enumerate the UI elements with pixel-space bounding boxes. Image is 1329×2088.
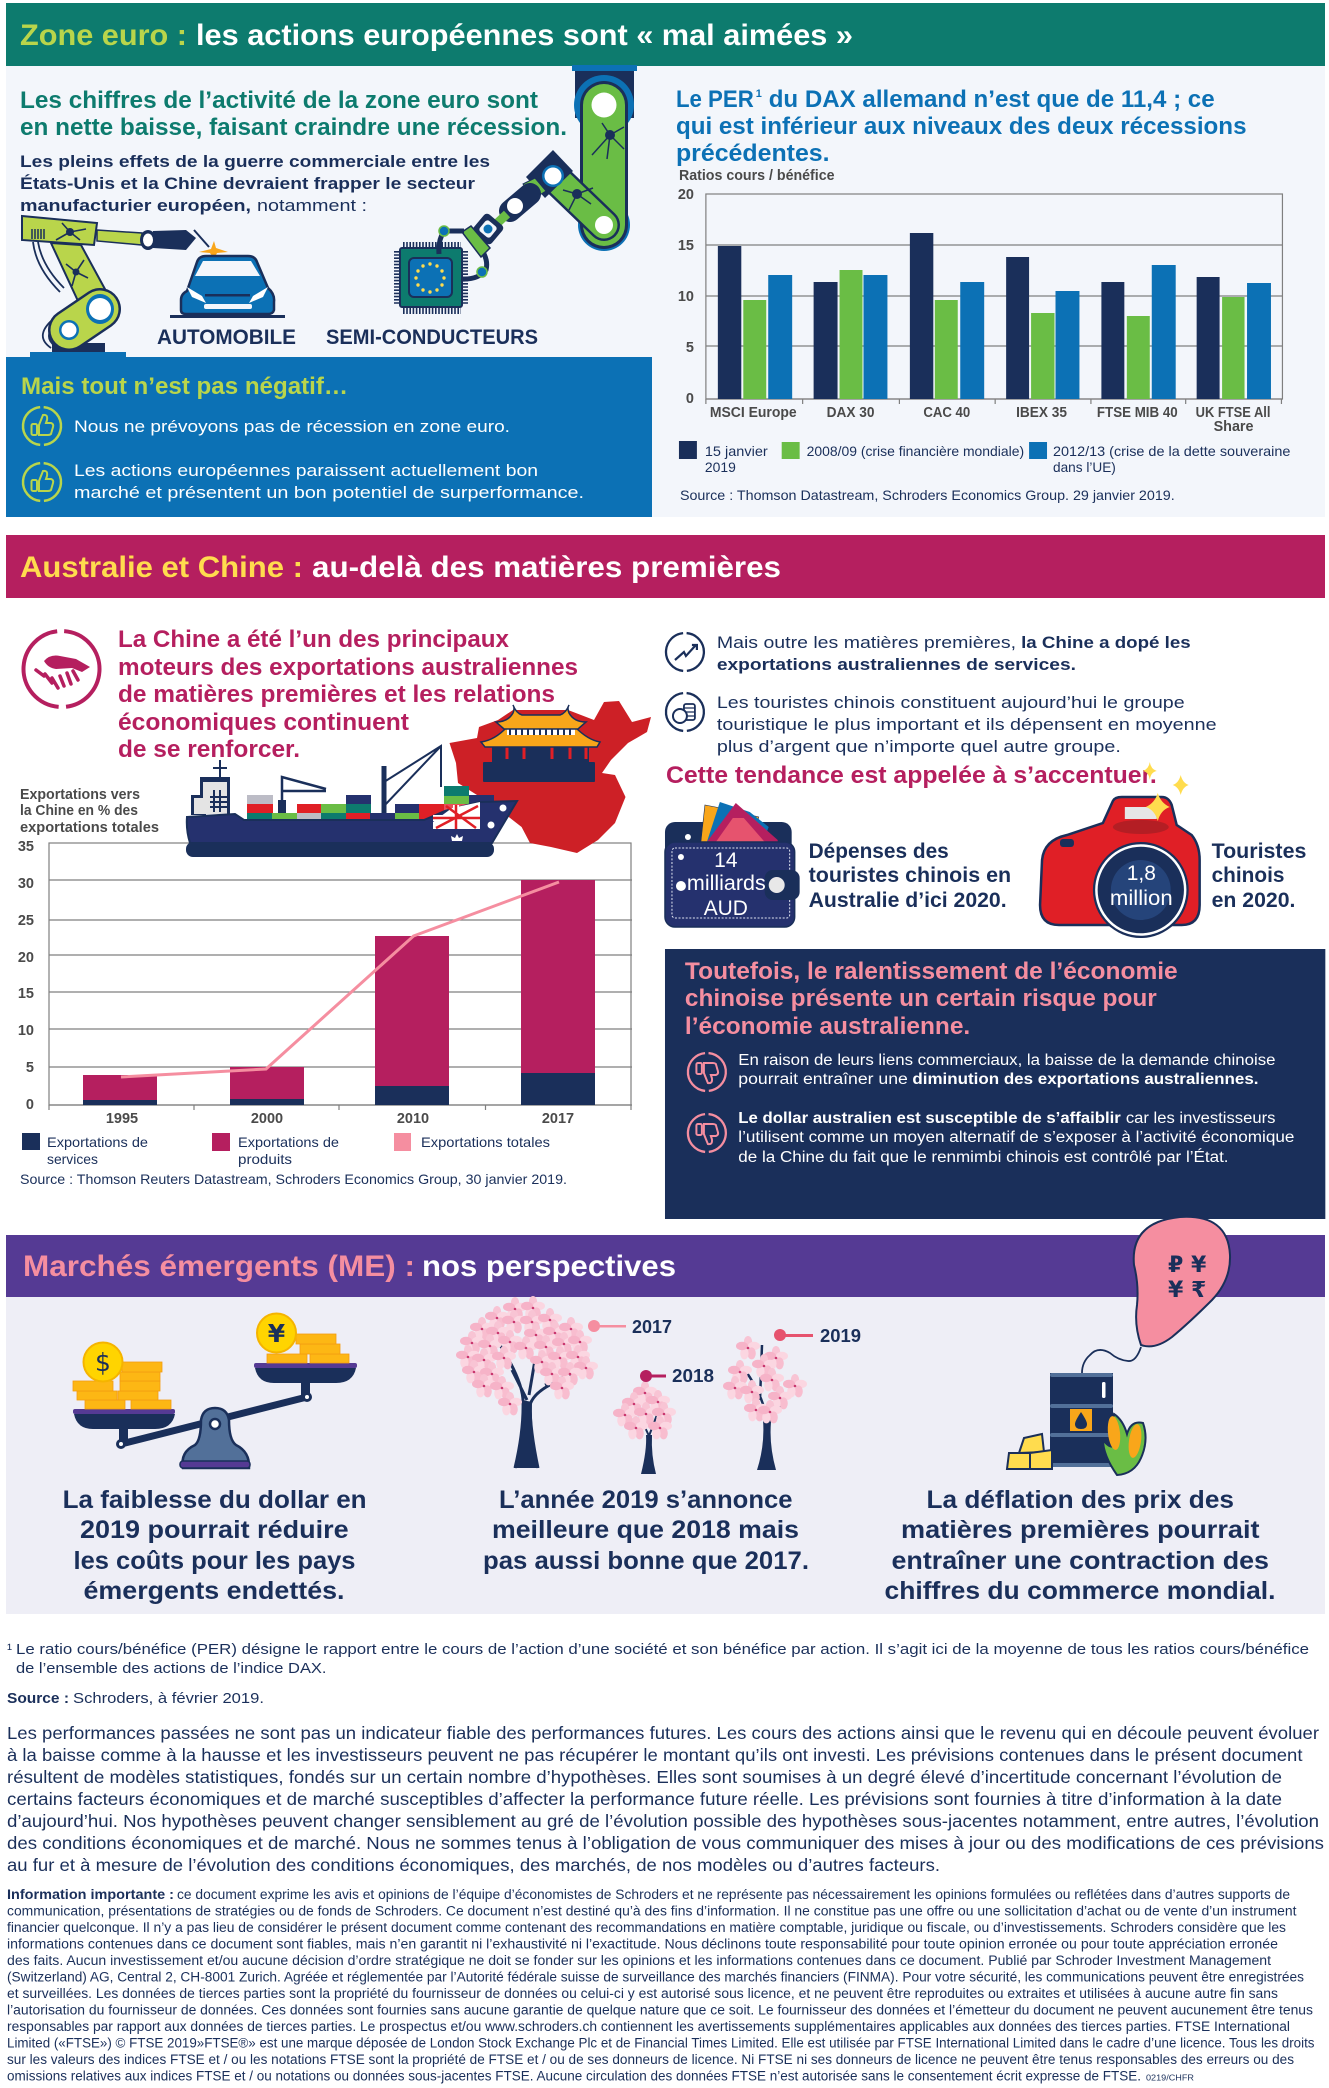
heading: China driver of Australian exports: moteurs des exportations australiennes [118, 654, 578, 681]
chart legend: 2019 [705, 459, 736, 475]
heading: not all negative: Mais tout n’est pas négatif… [21, 373, 348, 400]
heading: China driver of Australian exports: La Chine a été l’un des principaux [118, 626, 510, 653]
legal notice: des faits. Aucun investissement et/ou aucune décision d’ordre stratégique ne doit se fonder sur les opinions et les informations contenues dans ce document. Publié par Schroder Investment Management [7, 1953, 1271, 1968]
legal notice: (Switzerland) AG, Central 2, CH-8001 Zurich. Agréée et réglementée par l’Autorité fédérale suisse de surveillance des marchés financiers (FINMA). Pour votre sécurité, les communications peuvent être enregistrées [7, 1970, 1304, 1984]
label: 2017 [588, 1317, 672, 1337]
illustration: container ship with Australian flag [186, 746, 517, 857]
icon: cherry tree 2018 [613, 1381, 676, 1474]
caption: commodity deflation [884, 1486, 1276, 1605]
icon: growth chart [664, 631, 705, 673]
icon: wallet with banknotes: milliards [687, 872, 766, 895]
icon: coins [664, 691, 705, 733]
footnote [7, 1641, 1309, 1677]
legal notice [7, 1887, 1315, 2084]
heading: activity falling: en nette baisse, faisant craindre une récession. [20, 114, 567, 141]
legal notice: financier quelconque. Il n’y a pas lieu de considérer le présent document comme contenant des recommandations en matière comptable, juridique ou fiscale, ou d’investissements. Schroders considère que les [7, 1920, 1286, 1935]
disclaimer paragraph: past performance: à la baisse comme à la hausse et les investisseurs peuvent ne pas récupérer le montant qu’ils ont investi. Les prévisions contenues dans le présent document [7, 1745, 1303, 1765]
text: Chinese tourists: plus d’argent que n’importe quel autre groupe. [717, 737, 1121, 756]
heading: DAX PER [676, 86, 1247, 167]
icon: cherry tree 2017 [456, 1296, 598, 1468]
heading: risk [685, 958, 1178, 1040]
text: spending: Australie d’ici 2020. [809, 889, 1007, 912]
disclaimer paragraph: past performance: résultent de modèles statistiques, fondés sur un certain nombre d’hypothèses. Elles sont soumises à un degré élevé d’incertitude concernant l’évolution de [7, 1767, 1282, 1787]
source line [7, 1690, 264, 1707]
legal notice: 0219/CHFR [1146, 2072, 1194, 2082]
caption: weak dollar [63, 1486, 367, 1605]
chart axis title: Exportations vers [20, 787, 140, 803]
section header: Zone euro: Zone euro : [20, 19, 187, 52]
section header: Australie et Chine [6, 535, 1325, 598]
heading: DAX PER: Le PER [676, 86, 754, 113]
footnote: Le ratio cours/bénéfice (PER) désigne le rapport entre le cours de l’action d’une société et son bénéfice par action. Il s’agit ici de la moyenne de tous les ratios cours/bénéfice [16, 1641, 1309, 1658]
text: tourists [1212, 840, 1306, 912]
heading: DAX PER: 1 [756, 88, 762, 100]
heading: DAX PER: qui est inférieur aux niveaux des deux récessions [676, 113, 1247, 140]
section header: Marchés émergents: nos perspectives [422, 1250, 676, 1283]
bar chart: price earnings ratios: FTSE MIB 40 [1097, 405, 1178, 421]
heading: China driver of Australian exports: de se renforcer. [118, 736, 300, 763]
text: services exports: Mais outre les matières premières, [717, 633, 1016, 652]
icon: thumbs up [21, 405, 63, 447]
bar and line chart: exports to China: 2000 [251, 1111, 283, 1127]
footnote: ¹ [7, 1641, 12, 1658]
icon: camera: 1,8 [1127, 862, 1156, 885]
disclaimer paragraph: past performance: au fur et à mesure de l’évolution des conditions économiques, des marchés, de nos modèles ou d’autres facteurs. [7, 1855, 940, 1875]
text: lower demand: diminution des exportations australiennes. [912, 1071, 1259, 1088]
bar and line chart: exports to China: 0 [26, 1097, 34, 1113]
label: 2018 [640, 1366, 714, 1386]
panel: risk to Australian economy [665, 949, 1325, 1219]
disclaimer paragraph: past performance [7, 1723, 1324, 1875]
bar chart: price earnings ratios: UK FTSE All [1196, 405, 1270, 421]
bar chart: price earnings ratios: Share [1214, 419, 1254, 435]
heading: activity falling [20, 87, 567, 141]
text block: trade war effects: manufacturier européen, [20, 196, 251, 215]
text: lower demand: En raison de leurs liens commerciaux, la baisse de la demande chinoise [738, 1052, 1275, 1069]
chart legend: dans l’UE) [1053, 459, 1116, 475]
heading: risk: chinoise présente un certain risque pour [685, 985, 1157, 1012]
footnote: de l’ensemble des actions de l’indice DAX. [16, 1660, 326, 1677]
icon: balance with coins: $ [95, 1348, 111, 1377]
text: weaker dollar: Le dollar australien est susceptible de s’affaiblir [738, 1110, 1121, 1127]
caption: 2019 outlook: meilleure que 2018 mais [492, 1516, 799, 1544]
chart legend: 2008/09 (crise financière mondiale) [807, 443, 1024, 459]
caption: commodity deflation: entraîner une contraction des [892, 1547, 1269, 1575]
bar chart: price earnings ratios: CAC 40 [923, 405, 970, 421]
heading: China driver of Australian exports: de matières premières et les relations [118, 681, 555, 708]
caption: weak dollar: émergents endettés. [84, 1577, 344, 1605]
text: services exports [717, 633, 1191, 674]
section header: Marchés émergents: Marchés émergents (ME) : [23, 1250, 415, 1283]
bar and line chart: exports to China: 20 [18, 950, 34, 966]
section header: Marchés émergents [6, 1235, 1325, 1297]
caption: 2019 outlook [483, 1486, 809, 1575]
text block: trade war effects: Les pleins effets de la guerre commerciale entre les [20, 152, 490, 171]
Australian flag [433, 802, 480, 829]
legal notice: Limited («FTSE») © FTSE 2019»FTSE®» est une marque déposée de London Stock Exchange Plc et de Financial Times Limited. Elle est utilisée par FTSE International Limited dans le cadre d’une licence. Tous les droits [7, 2036, 1315, 2050]
chart legend: 15 janvier [705, 443, 768, 459]
chart legend [679, 441, 1291, 475]
bar chart: price earnings ratios: 5 [686, 340, 694, 356]
source line: Source : [7, 1690, 69, 1707]
bar chart: price earnings ratios: 0 [686, 391, 694, 407]
chart axis title: exportations totales [20, 820, 159, 836]
chart axis title: Ratios cours / bénéfice [679, 168, 835, 184]
text: no recession: Nous ne prévoyons pas de récession en zone euro. [74, 417, 510, 436]
heading: activity falling: Les chiffres de l’activité de la zone euro sont [20, 87, 538, 114]
icon: wallet with banknotes [665, 802, 800, 927]
legal notice: ce document exprime les avis et opinions de l’équipe d’économistes de Schroders et ne représente pas nécessairement les opinions formulées ou reflétées dans d’autres supports de [177, 1887, 1290, 1902]
label: 2017: 2017 [632, 1317, 672, 1337]
panel: DAX PER chart [676, 86, 1291, 503]
bar and line chart: exports to China: 25 [18, 913, 34, 929]
caption: commodity deflation: matières premières pourrait [901, 1516, 1260, 1544]
text: European shares cheap: marché et présentent un bon potentiel de surperformance. [74, 483, 584, 502]
panel: not all negative [6, 357, 652, 517]
chart axis title [20, 787, 159, 836]
icon: balance with coins [73, 1314, 357, 1468]
bar and line chart: exports to China: 2010 [397, 1111, 429, 1127]
icon: car [170, 256, 285, 318]
chart legend: services [47, 1151, 98, 1167]
bar chart: price earnings ratios: 10 [678, 289, 694, 305]
text: lower demand: pourrait entraîner une [738, 1071, 908, 1088]
text: European shares cheap [74, 461, 584, 502]
text: weaker dollar: de la Chine du fait que le renmimbi chinois est contrôlé par l’État. [738, 1149, 1229, 1166]
legal notice: Information importante : [7, 1887, 174, 1902]
bar and line chart: exports to China: 10 [18, 1023, 34, 1039]
chart legend: produits [238, 1151, 292, 1167]
bar and line chart: exports to China: 5 [26, 1060, 34, 1076]
bar and line chart: exports to China: 2017 [542, 1111, 574, 1127]
icon: camera [1040, 793, 1200, 938]
bar chart: price earnings ratios [678, 187, 1282, 435]
caption: weak dollar: les coûts pour les pays [74, 1547, 356, 1575]
icon: thumbs down [686, 1112, 727, 1154]
caption: weak dollar: La faiblesse du dollar en [63, 1486, 367, 1514]
chart legend: Exportations de [47, 1134, 148, 1150]
caption: 2019 outlook: L’année 2019 s’annonce [499, 1486, 793, 1514]
illustration: map of China with palace [450, 701, 651, 853]
icon: handshake [21, 628, 102, 710]
icon: sparkles [1143, 762, 1189, 795]
text: Chinese tourists: touristique le plus important et ils dépensent en moyenne [717, 715, 1217, 734]
disclaimer paragraph: past performance: des conditions économiques et de marché. Nous ne sommes tenus à l’obligation de vous communiquer des mises à jour ou des modifications de ces prévisions [7, 1833, 1324, 1853]
icon: robot arm gripping chip [439, 65, 637, 279]
right column: tourism and services [664, 631, 1306, 938]
source note: Source : Thomson Reuters Datastream, Schroders Economics Group, 30 janvier 2019. [20, 1171, 567, 1187]
caption: commodity deflation: La déflation des prix des [926, 1486, 1234, 1514]
panel: emerging markets [6, 1217, 1325, 1614]
text block: trade war effects: États-Unis et la Chine devraient frapper le secteur [20, 174, 475, 193]
text: lower demand [738, 1052, 1275, 1088]
chart legend: Exportations totales [421, 1134, 550, 1150]
text: weaker dollar [738, 1110, 1294, 1166]
icon: deflating balloon with oil barrel, gold and corn [1007, 1217, 1230, 1475]
text: spending: Dépenses des [809, 840, 949, 863]
text: spending [809, 840, 1011, 912]
bar and line chart: exports to China: 30 [18, 876, 34, 892]
section header: Australie et Chine: Australie et Chine : [20, 551, 303, 584]
bar and line chart: exports to China: 15 [18, 986, 34, 1002]
heading: trend: Cette tendance est appelée à s’accentuer. [666, 762, 1157, 789]
icon: cherry tree 2019 [723, 1336, 807, 1470]
icon: camera: million [1110, 887, 1173, 910]
caption: weak dollar: 2019 pourrait réduire [80, 1516, 349, 1544]
text: weaker dollar: l’utilisent comme un moyen alternatif de s’exposer à l’activité économique [738, 1129, 1294, 1146]
bar chart: price earnings ratios: 20 [678, 187, 694, 203]
icon: wallet with banknotes: AUD [704, 897, 748, 920]
text: European shares cheap: Les actions européennes paraissent actuellement bon [74, 461, 538, 480]
text: spending: touristes chinois en [809, 864, 1011, 887]
chart legend: Exportations de [238, 1134, 339, 1150]
icon: deflating balloon with oil barrel, gold and corn: ¥ ₹ [1168, 1278, 1206, 1303]
text: services exports: la Chine a dopé les [1021, 633, 1191, 652]
icon: balance with coins: ¥ [268, 1319, 286, 1348]
panel: euro zone activity [6, 65, 1325, 517]
section header: Australie et Chine: au-delà des matières premières [312, 551, 781, 584]
text: tourists: Touristes [1212, 840, 1306, 863]
legal notice: l’autorisation du fournisseur de données. Ces données sont fournies sans aucune garantie de quelque nature que ce soit. Le fournisseur des données et l’émetteur du document ne peuvent aucunement être tenus [7, 2002, 1313, 2018]
text block: trade war effects [20, 152, 490, 215]
legal notice: sur les valeurs des indices FTSE et / ou les notations FTSE sont la propriété de FTSE et / ou de ses donneurs de licence. Ni FTSE ni ses donneurs de licence ne peuvent être tenus responsables des erreurs ou des [7, 2052, 1294, 2067]
bar and line chart: exports to China [18, 787, 632, 1187]
label: semiconductors: SEMI-CONDUCTEURS [326, 326, 538, 349]
heading: China driver of Australian exports: économiques continuent [118, 709, 409, 736]
text: Chinese tourists: Les touristes chinois constituent aujourd’hui le groupe [717, 693, 1185, 712]
label: 2019 [774, 1326, 861, 1346]
legal notice: responsables par rapport aux données de tierces parties. Le prospectus et/ou www.schroders.ch contiennent les avertissements supplémentaires applicables aux données des tierces parties. FTSE International [7, 2019, 1290, 2034]
disclaimer paragraph: past performance: certains facteurs économiques et de marché susceptibles d’affecter la performance future réelle. Les prévisions sont fournies à titre d’information à la date [7, 1789, 1282, 1809]
icon: EU semiconductor chip [397, 245, 465, 311]
chart legend: 2012/13 (crise de la dette souveraine [1053, 443, 1291, 459]
chart axis title: la Chine en % des [20, 803, 138, 819]
text: tourists: en 2020. [1212, 889, 1295, 912]
bar chart: price earnings ratios: IBEX 35 [1016, 405, 1067, 421]
text: weaker dollar: car les investisseurs [1126, 1110, 1276, 1127]
legal notice: communication, présentations de stratégies ou de fonds de Schroders. Ce document n’est destiné qu’à des fins d’information. Il ne constitue pas une offre ou une sollicitation d’achat ou de vente d’un instrument [7, 1904, 1297, 1918]
source note: Source : Thomson Datastream, Schroders Economics Group. 29 janvier 2019. [680, 487, 1175, 503]
bar and line chart: exports to China: 1995 [106, 1111, 138, 1127]
chart legend [22, 1133, 550, 1167]
icon: wallet with banknotes: 14 [714, 849, 738, 872]
bar chart: price earnings ratios: DAX 30 [827, 405, 874, 421]
legal notice: omissions relatives aux indices FTSE et / ou notations ou données sous-jacentes FTSE. Aucune circulation des données FTSE n’est autorisée sans le consentement écrit expresse de FTSE. [7, 2068, 1141, 2084]
source line: Schroders, à février 2019. [73, 1690, 264, 1707]
heading: risk: Toutefois, le ralentissement de l’économie [685, 958, 1178, 985]
section header: Zone euro [6, 3, 1325, 66]
bar chart: price earnings ratios: MSCI Europe [710, 405, 797, 421]
legal notice: et surveillées. Les données de tierces parties sont la propriété du fournisseur de données ou celui-ci y est autorisé sous licence, et ne peuvent être reproduites ou extraites et utilisées à aucune autre fin sans [7, 1986, 1278, 2001]
legal notice: informations contenues dans ce document sont fiables, mais n’en garantit ni l’exhaustivité ni l’exactitude. Nous déclinons toute responsabilité pour toute opinion erronée ou pour toute appréciation erronée [7, 1936, 1278, 1952]
bar chart: price earnings ratios: 15 [678, 238, 694, 254]
heading: DAX PER: précédentes. [676, 140, 830, 167]
label: 2019: 2019 [820, 1326, 861, 1346]
icon: welding robot arm [22, 216, 228, 357]
label: automobile: AUTOMOBILE [157, 326, 296, 349]
disclaimer paragraph: past performance: d’aujourd’hui. Nos hypothèses peuvent changer sensiblement au gré de l’évolution possible des hypothèses sous-jacentes notamment, entre autres, l’évolution [7, 1811, 1319, 1831]
section header: Zone euro: les actions européennes sont « mal aimées » [196, 19, 853, 52]
icon: deflating balloon with oil barrel, gold and corn: ₽ ¥ [1168, 1253, 1207, 1278]
text: Chinese tourists [717, 693, 1217, 756]
disclaimer paragraph: past performance: Les performances passées ne sont pas un indicateur fiable des performances futures. Les cours des actions ainsi que le revenu qui en découle peuvent évoluer [7, 1723, 1319, 1743]
text: services exports: exportations australiennes de services. [717, 655, 1076, 674]
bar and line chart: exports to China: 35 [18, 839, 34, 855]
icon: thumbs up [21, 461, 63, 503]
text block: trade war effects: notamment : [257, 196, 367, 215]
heading: risk: l’économie australienne. [685, 1013, 970, 1040]
icon: thumbs down [686, 1051, 727, 1093]
caption: commodity deflation: chiffres du commerce mondial. [884, 1577, 1276, 1605]
label: 2018: 2018 [672, 1366, 714, 1386]
heading: DAX PER: du DAX allemand n’est que de 11,4 ; ce [769, 86, 1215, 113]
text: tourists: chinois [1212, 864, 1284, 887]
heading: China driver of Australian exports [118, 626, 578, 763]
caption: 2019 outlook: pas aussi bonne que 2017. [483, 1547, 809, 1575]
